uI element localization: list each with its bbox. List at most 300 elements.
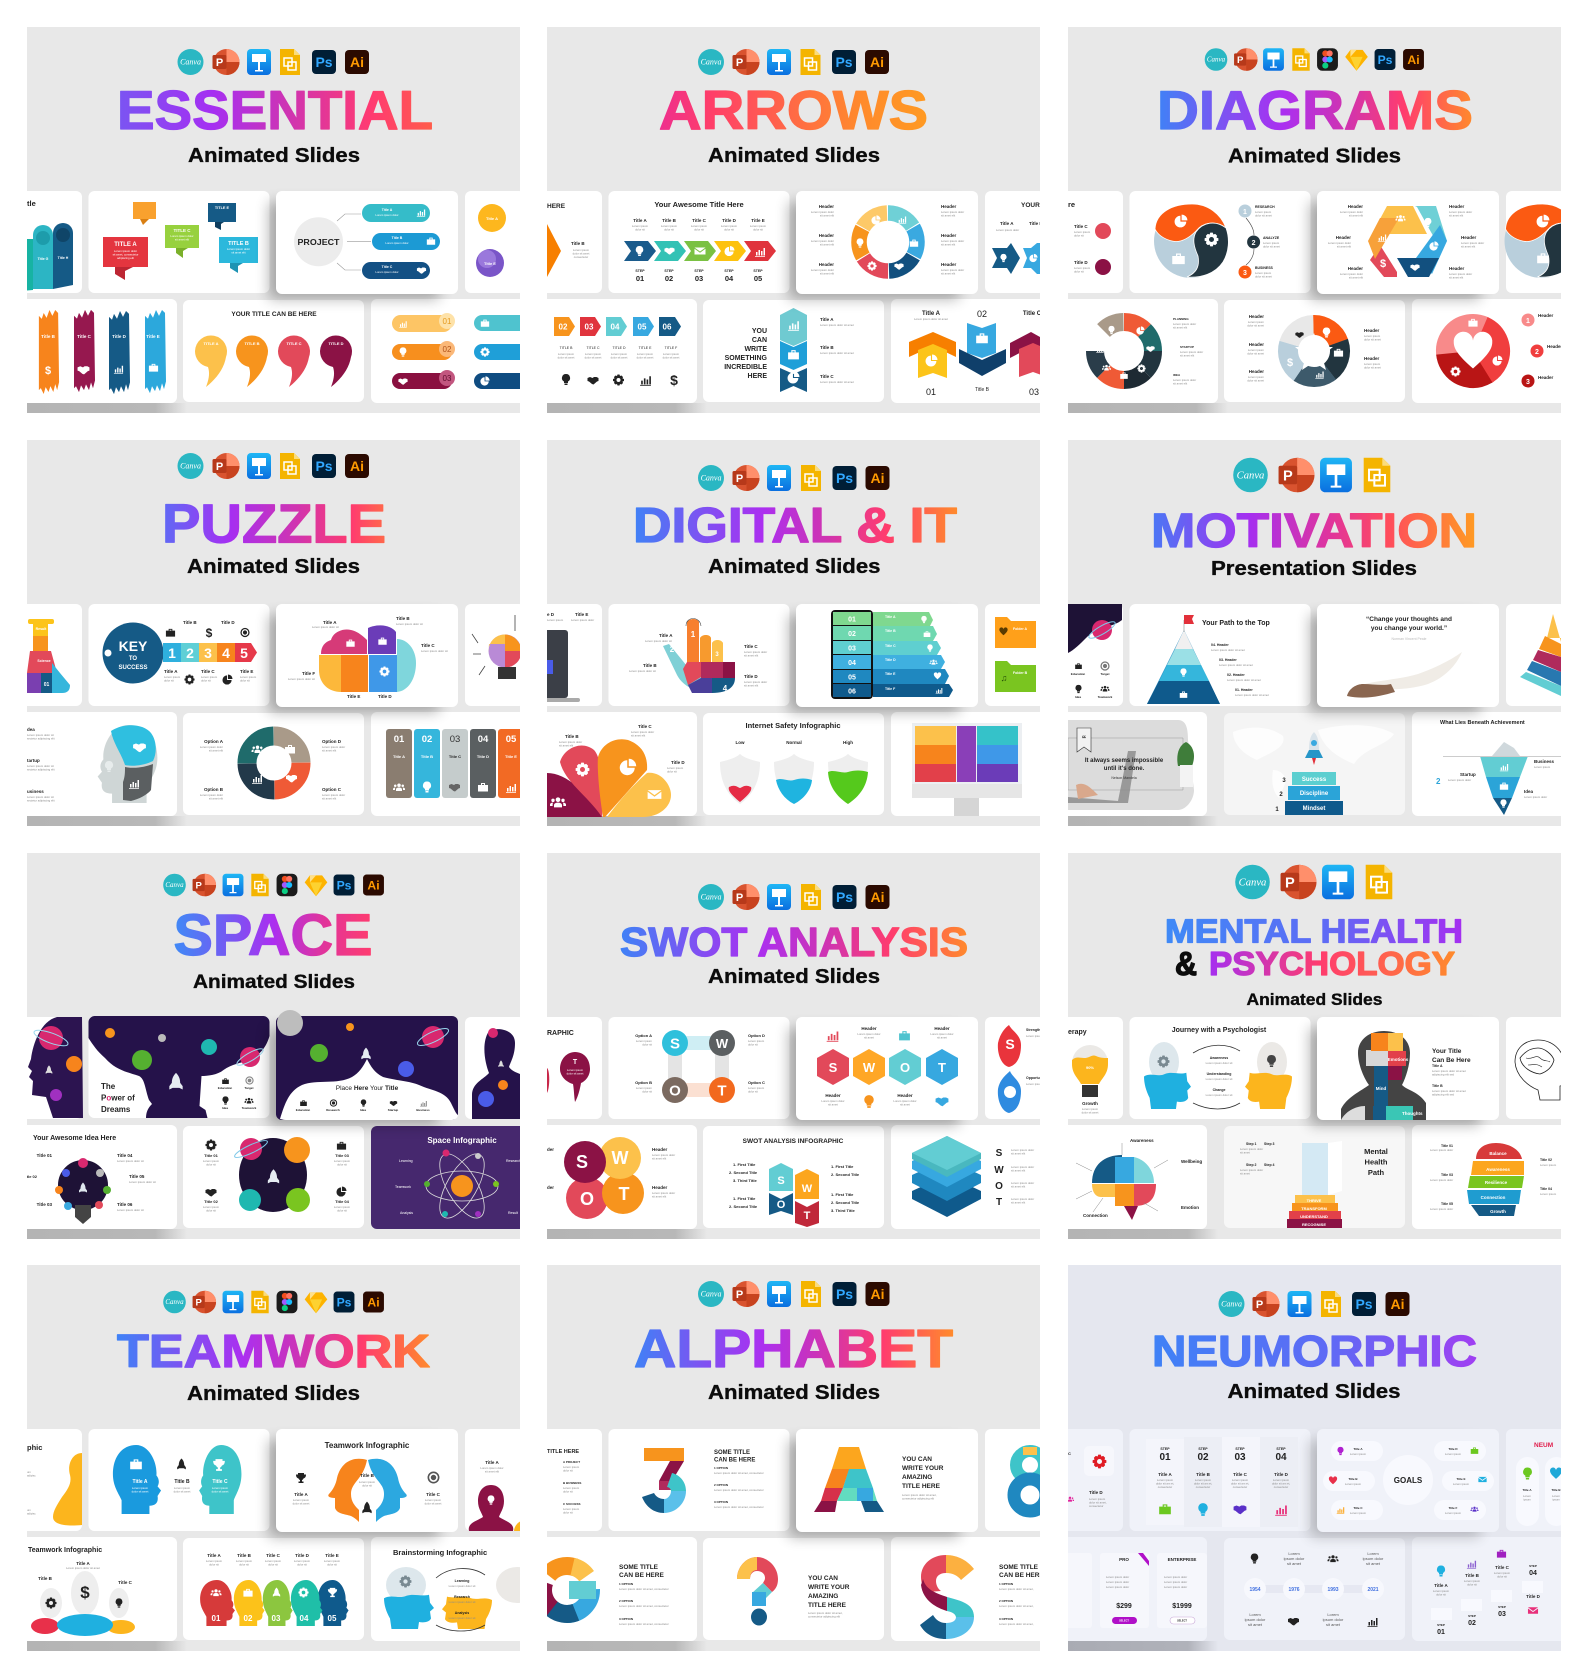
slide: staircase steps: dolor sit bbox=[1497, 1574, 1507, 1578]
slide: hand gesture: 3 bbox=[715, 652, 719, 658]
slide: key to success: Lorem ipsum bbox=[201, 675, 217, 679]
slide: planet corner: Education bbox=[1071, 672, 1085, 676]
slide: staircase steps: Title D bbox=[1526, 1594, 1541, 1599]
slide: arrow ring: sit amet elit bbox=[941, 213, 955, 217]
slide: swot brushes: Opportunity bbox=[1026, 1076, 1046, 1080]
slide: swot analysis infographic: 1. First Title bbox=[733, 1162, 756, 1167]
slide: head puzzle: sectetur adipiscing elit bbox=[27, 798, 55, 802]
slide: path to the top: Lorem ipsum dolor sit amet bbox=[1227, 678, 1261, 682]
slide: five part star bbox=[1224, 300, 1405, 402]
slide: laptop: Lorem ipsum dolor bbox=[571, 618, 594, 622]
slide: growth bulb: dolor sit amet bbox=[1082, 1110, 1099, 1114]
slide: swot layers: Lorem ipsum dolor bbox=[1011, 1197, 1034, 1201]
slide: letter S: 3 OPTION bbox=[999, 1617, 1013, 1621]
panel: Puzzle bbox=[19, 440, 526, 826]
slide: mental health stairs: Step 3 bbox=[1264, 1142, 1275, 1146]
slide: hand gesture: Lorem ipsum dolor sit bbox=[645, 639, 672, 643]
slide: place here your title: Idea bbox=[360, 1108, 366, 1112]
slide: brush banners bbox=[19, 299, 177, 403]
slide: rainbow head: Awareness bbox=[1486, 1167, 1510, 1172]
slide: quote: Norman Vincent Peale bbox=[1392, 637, 1427, 641]
slide: speech boxes: sit amet elit bbox=[175, 237, 189, 241]
title line 1: MENTAL HEALTH bbox=[1165, 912, 1463, 950]
slide: head puzzle: dea bbox=[27, 727, 35, 732]
slide: arrows up and down: 01 bbox=[926, 387, 936, 397]
title: NEUMORPHIC bbox=[1152, 1327, 1477, 1376]
slide: quote: you change your world.” bbox=[1371, 625, 1447, 632]
slide: hex list bbox=[703, 300, 884, 402]
slide: numbered steps: 05 bbox=[638, 322, 647, 332]
slide: key to success: SUCCESS bbox=[118, 665, 148, 671]
slide: arrow ring: Lorem ipsum dolor bbox=[811, 210, 834, 214]
slide: swot layers: sit amet elit bbox=[1011, 1151, 1025, 1155]
slide: five part star: Lorem ipsum bbox=[1248, 375, 1264, 379]
title: ARROWS bbox=[659, 79, 928, 141]
slide: brain puzzle bbox=[1060, 1125, 1207, 1229]
slide: five heads: Lorem ipsum bbox=[265, 1559, 281, 1563]
slide: partial chevrons bbox=[985, 191, 1045, 293]
slide: numeral 3: Lorem ipsum dolor sit amet, consectetur bbox=[714, 1471, 764, 1475]
app icons: P bbox=[216, 461, 223, 473]
slide: journey with psychologist bbox=[1130, 1017, 1310, 1119]
slide: puzzle donut: Lorem ipsum dolor bbox=[322, 745, 345, 749]
slide: rainbow head: Title 05 bbox=[1441, 1202, 1453, 1206]
slide: swot analysis infographic: 1. First Title bbox=[733, 1196, 756, 1201]
slide: swot circles: Lorem ipsum dolor bbox=[652, 1191, 675, 1195]
slide: swot layers: Lorem ipsum dolor bbox=[1011, 1165, 1034, 1169]
slide: pillars: Title H bbox=[58, 256, 69, 260]
slide: phone list: 05 bbox=[848, 674, 856, 682]
slide: puzzle ring: IDEA bbox=[1173, 373, 1181, 377]
slide: space infographic: Space Infographic bbox=[427, 1136, 497, 1145]
slide: iceberg: Startup bbox=[1460, 772, 1476, 777]
slide: hex list: SOMETHING bbox=[725, 355, 768, 362]
slide: folders: Folder A bbox=[1013, 627, 1028, 631]
slide: four steps: 04 bbox=[1275, 1452, 1287, 1463]
slide: four steps: Title D bbox=[1274, 1472, 1289, 1477]
slide: swot hexagons: S bbox=[829, 1060, 838, 1075]
slide: puzzle flask bbox=[19, 604, 82, 706]
app icons: Ps bbox=[337, 1295, 352, 1309]
slide: numbered pills: 02 bbox=[443, 345, 452, 354]
slide: space infographic: Result bbox=[508, 1211, 518, 1215]
slide: brainstorming: Lorem ipsum dolor sit bbox=[449, 1600, 476, 1604]
slide: letter G: Lorem ipsum dolor sit amet, consectetur bbox=[619, 1587, 669, 1591]
slide: chevron steps: STEP bbox=[753, 269, 763, 273]
slide: neumorphic pillars: Lorem bbox=[1552, 1494, 1560, 1498]
slide: swot circles: sit amet elit bbox=[652, 1194, 666, 1198]
slide: pricing tables: ENTERPRISE bbox=[1168, 1557, 1196, 1562]
slide: folders bbox=[985, 604, 1045, 706]
slide: space infographic: Teamwork bbox=[395, 1185, 411, 1189]
subtitle: Presentation Slides bbox=[1211, 558, 1417, 580]
slide: quote bubbles: TITLE A bbox=[204, 341, 219, 346]
slide: numbered steps: $ bbox=[670, 372, 678, 388]
slide: rainbow head: Lorem ipsum dolor bbox=[1430, 1148, 1453, 1152]
slide: space infographic bbox=[371, 1126, 526, 1229]
slide: timeline: Lorem bbox=[1327, 1612, 1339, 1617]
slide: puzzle cloud: Title D bbox=[378, 694, 392, 699]
slide: teams heads: Lorem ipsum bbox=[212, 1486, 228, 1490]
slide: teamwork two heads: Lorem ipsum bbox=[293, 1498, 309, 1502]
slide: staircase steps: STEP bbox=[1468, 1614, 1476, 1618]
app icons: P bbox=[1285, 875, 1295, 891]
slide: swot circles: T bbox=[618, 1184, 630, 1204]
slide: head puzzle: Lorem ipsum dolor sit bbox=[27, 764, 54, 768]
slide: circle titles bbox=[1068, 191, 1123, 293]
panel: Diagrams bbox=[1060, 27, 1579, 413]
slide: puzzle cloud: Title E bbox=[347, 694, 360, 699]
slide: puzzle ring: PLANNING bbox=[1173, 317, 1189, 321]
slide: pricing tables: Lorem ipsum dolor bbox=[1106, 1575, 1129, 1579]
slide: chevron steps: Your Awesome Title Here bbox=[654, 200, 744, 209]
slide: staircase steps: Lorem ipsum bbox=[1494, 1571, 1510, 1575]
slide: key to success: 4 bbox=[222, 645, 230, 661]
slide: title list: Lorem ipsum bbox=[563, 1507, 579, 1511]
slide: five heads bbox=[183, 1538, 364, 1640]
slide: place here your title: Business bbox=[416, 1108, 430, 1112]
slide: space infographic: Analysis bbox=[400, 1211, 413, 1215]
slide: staircase steps: STEP bbox=[1498, 1605, 1506, 1609]
slide: teamwork two heads: Teamwork Infographic bbox=[325, 1441, 410, 1450]
slide: swot circles: S bbox=[576, 1152, 588, 1172]
slide: swot hexagons: O bbox=[900, 1060, 910, 1075]
slide: iceberg bbox=[1412, 712, 1567, 816]
slide: swot hexagons: sit amet bbox=[900, 1102, 910, 1106]
slide: numbered steps: dolor sit amet bbox=[585, 355, 602, 359]
slide: hex list: YOU bbox=[752, 328, 767, 335]
slide: numeral 3: Lorem ipsum dolor sit amet, consectetur bbox=[714, 1488, 764, 1492]
slide: arrow ring: sit amet elit bbox=[820, 213, 834, 217]
slide: arrow ring bbox=[796, 191, 978, 294]
slide: five part star: Header bbox=[1249, 314, 1264, 319]
app icons bbox=[163, 874, 384, 896]
slide: place here your title bbox=[276, 1010, 458, 1120]
slide: timeline: ipsum dolor bbox=[1245, 1617, 1266, 1622]
app icons: Canva bbox=[165, 1298, 184, 1306]
app icons: Canva bbox=[1207, 56, 1226, 64]
slide: pillars: Title G bbox=[38, 257, 49, 261]
slide: planet corner: Idea bbox=[1075, 695, 1081, 699]
slide: path to the top: 04. Header bbox=[1211, 643, 1229, 647]
slide: neumorphic pillars bbox=[1506, 1429, 1568, 1531]
slide: mental health stairs: THRIVE bbox=[1307, 1198, 1322, 1203]
title: SPACE bbox=[174, 903, 372, 968]
slide: speech boxes: sit amet elit bbox=[231, 250, 246, 254]
slide: world map rocket bbox=[1224, 713, 1405, 815]
slide: journey with psychologist: Lorem ipsum dolor sit bbox=[1206, 1093, 1233, 1097]
subtitle: Animated Slides bbox=[708, 556, 880, 578]
slide: maroon quote bubble: Lorem ipsum bbox=[567, 1068, 583, 1072]
slide: hand gesture: sit amet elit bbox=[744, 653, 758, 657]
slide: partial arrow: Lorem ipsum bbox=[573, 248, 589, 252]
slide: puzzle donut bbox=[183, 713, 364, 815]
subtitle: Animated Slides bbox=[187, 1383, 360, 1405]
slide: five part star: Header bbox=[1364, 356, 1380, 361]
slide: timeline: ipsum dolor bbox=[1363, 1556, 1384, 1561]
slide: growth bulb: 90% bbox=[1086, 1065, 1094, 1070]
slide: key to success: Title C bbox=[201, 669, 215, 674]
slide: pricing tables bbox=[1050, 1537, 1207, 1641]
slide: puzzle flask: 01 bbox=[44, 682, 49, 688]
slide: five part star: Header bbox=[1249, 342, 1264, 347]
app icons: P bbox=[1256, 1299, 1263, 1311]
app icons: Ps bbox=[836, 1286, 853, 1302]
slide: staircase steps bbox=[1412, 1537, 1567, 1641]
title: PUZZLE bbox=[162, 492, 386, 554]
slide: puzzle cloud: Title A bbox=[323, 620, 337, 625]
slide: amber head: phic bbox=[27, 1443, 42, 1452]
slide: hex list: Lorem ipsum dolor sit amet bbox=[820, 351, 854, 355]
slide: staircase steps: Title A bbox=[1434, 1583, 1448, 1588]
slide: journey with psychologist: Journey with a Psychologist bbox=[1172, 1027, 1267, 1034]
app icons bbox=[1205, 48, 1424, 71]
slide: internet safety shields: High bbox=[843, 740, 853, 745]
slide: arrow ring: Header bbox=[819, 233, 834, 238]
slide: puzzle donut: sit amet elit bbox=[322, 796, 336, 800]
slide: mental health stairs: Lorem ipsum dolor bbox=[1240, 1147, 1263, 1151]
slide: idea bulb: Lorem ipsum dolor sit bbox=[117, 1159, 144, 1163]
slide: swot analysis infographic: O bbox=[777, 1199, 786, 1211]
slide: planet corner: Target bbox=[1101, 672, 1109, 676]
slide: project: Title A bbox=[382, 208, 393, 212]
slide: arrow ring: Lorem ipsum dolor bbox=[941, 210, 964, 214]
slide: swot link circles: dolor sit bbox=[642, 1089, 652, 1093]
slide: hex list: Lorem ipsum dolor sit amet bbox=[820, 323, 854, 327]
slide: circle titles: Title C bbox=[1074, 224, 1088, 229]
slide: four steps: 03 bbox=[1234, 1452, 1246, 1463]
app icons: P bbox=[736, 1289, 743, 1301]
slide: speech boxes: Lorem ipsum dolor bbox=[170, 234, 194, 238]
slide: swot hexagons: T bbox=[938, 1060, 946, 1075]
app icons bbox=[698, 49, 889, 75]
slide: pricing tables: SELECT bbox=[1119, 1620, 1129, 1622]
slide: power of dreams: Teamwork bbox=[242, 1106, 257, 1110]
app icons bbox=[698, 465, 890, 491]
slide: key to success: 2 bbox=[186, 645, 194, 661]
slide: swot link circles: S bbox=[670, 1036, 680, 1052]
slide: numbered steps: TITLE F bbox=[665, 346, 677, 350]
slide: letter S: 1 OPTION bbox=[999, 1582, 1013, 1586]
slide: question mark bbox=[703, 1538, 884, 1640]
slide: hand gesture: 2 bbox=[670, 645, 675, 654]
slide: brainstorming bbox=[371, 1537, 538, 1641]
slide: arrow ring: Lorem ipsum dolor bbox=[811, 239, 834, 243]
slide: heart ring: 1 bbox=[1526, 318, 1530, 325]
panel: Motivation bbox=[1060, 440, 1567, 826]
slide: power of dreams: Power of bbox=[101, 1094, 135, 1102]
slide: question mark: TITLE HERE bbox=[808, 1602, 847, 1609]
slide: hexagon ring: Lorem ipsum dolor bbox=[1328, 241, 1351, 245]
slide: hand gesture: Title B bbox=[643, 663, 657, 668]
slide: heart ring: 3 bbox=[1526, 379, 1530, 386]
slide: idea bulb: Lorem ipsum dolor sit bbox=[117, 1208, 144, 1212]
slide: brainstorming: Research bbox=[454, 1595, 470, 1599]
slide: staircase steps: 03 bbox=[1498, 1611, 1506, 1618]
slide: chevron steps: Title C bbox=[692, 218, 707, 223]
slide: title list: TITLE HERE bbox=[547, 1449, 579, 1455]
app icons: Canva bbox=[701, 58, 721, 66]
slide: teams heads: dolor sit amet bbox=[212, 1489, 229, 1493]
slide: path to the top: Your Path to the Top bbox=[1202, 620, 1270, 627]
slide: numbered pills: 01 bbox=[443, 317, 452, 326]
panel: Mental Health & Psychology bbox=[1060, 853, 1568, 1239]
slide: yin yang: RESEARCH bbox=[1255, 205, 1275, 209]
slide: numbered steps: dolor sit amet bbox=[558, 355, 575, 359]
slide: head puzzle title: Lorem ipsum dolor sit amet bbox=[1432, 1069, 1466, 1073]
slide: chevron steps: STEP bbox=[724, 269, 734, 273]
slide: brush banners: Title C bbox=[77, 334, 92, 339]
slide: mental health stairs: Health bbox=[1365, 1158, 1388, 1166]
slide: swot analysis infographic: SWOT ANALYSIS INFOGRAPHIC bbox=[743, 1138, 844, 1145]
slide: iceberg: Lorem ipsum bbox=[1534, 765, 1551, 769]
slide: puzzle cloud: Title C bbox=[421, 643, 435, 648]
slide: head puzzle: Lorem ipsum dolor sit bbox=[27, 733, 54, 737]
slide: goals: Lorem ipsum bbox=[1445, 1452, 1462, 1456]
slide: rocket planets: Title 04 bbox=[335, 1199, 350, 1204]
slide: chevron steps: Lorem ipsum bbox=[721, 224, 737, 228]
slide: numbered steps: 06 bbox=[663, 322, 672, 332]
card shadow bbox=[1310, 1028, 1480, 1125]
slide: rainbow head: Lorem ipsum bbox=[1540, 1163, 1557, 1167]
subtitle: Animated Slides bbox=[1246, 990, 1382, 1009]
slide: staircase steps: Lorem ipsum bbox=[1464, 1579, 1480, 1583]
slide: four steps: dolor sit am et, bbox=[1156, 1481, 1174, 1485]
app icons: Canva bbox=[180, 58, 201, 66]
slide: numbered steps: dolor sit amet bbox=[663, 355, 680, 359]
slide: laptop: e D bbox=[547, 612, 555, 617]
slide: world map rocket: 3 bbox=[1282, 778, 1286, 784]
slide: numbered steps bbox=[539, 299, 697, 403]
slide: timeline: Lorem bbox=[1249, 1612, 1261, 1617]
slide: pricing tables: Lorem ipsum dolor bbox=[1106, 1580, 1129, 1584]
slide: gear tile: Title D bbox=[1089, 1490, 1103, 1495]
slide: rainbow head: Connection bbox=[1481, 1195, 1506, 1200]
app icons: P bbox=[1283, 468, 1293, 484]
slide: timeline: 2021 bbox=[1367, 1587, 1379, 1593]
slide: world map rocket: Discipline bbox=[1300, 791, 1329, 797]
slide: swot analysis infographic: 2. Second Title bbox=[831, 1172, 860, 1177]
slide: hexagon ring: Header bbox=[1449, 204, 1465, 209]
slide: rocket planets: dolor sit bbox=[206, 1208, 216, 1212]
slide: internet safety shields: Internet Safety Infographic bbox=[745, 721, 841, 730]
slide: brain puzzle: Wellbeing bbox=[1181, 1159, 1202, 1164]
card shadow bbox=[269, 1028, 439, 1125]
card shadow bbox=[789, 202, 959, 299]
slide: head puzzle title: Your Title bbox=[1432, 1048, 1461, 1055]
slide: puzzle donut: Option D bbox=[322, 739, 342, 744]
slide: key to success: dolor sit bbox=[201, 678, 211, 682]
card shadow bbox=[1310, 1440, 1480, 1537]
slide: chevron steps: dolor sit bbox=[694, 227, 704, 231]
panel: Teamwork bbox=[19, 1265, 538, 1651]
card shadow bbox=[789, 615, 959, 712]
slide: quote bbox=[1317, 604, 1499, 707]
card shadow bbox=[1310, 615, 1480, 712]
slide: partial chevrons: Lorem ipsum dolor bbox=[996, 228, 1019, 232]
slide: swot brushes: Strength bbox=[1026, 1028, 1040, 1032]
slide: key to success: 5 bbox=[240, 645, 248, 661]
slide: letter G: SOME TITLE bbox=[619, 1564, 658, 1571]
slide: letter S: Lorem ipsum dolor sit amet, bbox=[999, 1604, 1034, 1608]
slide: five part star: Lorem ipsum bbox=[1248, 348, 1264, 352]
slide: quote bubbles: YOUR TITLE CAN BE HERE bbox=[231, 311, 317, 318]
title: ALPHABET bbox=[634, 1319, 953, 1379]
app icons: Ps bbox=[1355, 1296, 1373, 1312]
slide: timeline: Lorem bbox=[1367, 1551, 1379, 1556]
slide: fan diagram bbox=[539, 712, 697, 817]
slide: arrows up and down: 02 bbox=[977, 309, 987, 319]
subtitle: Animated Slides bbox=[708, 1382, 880, 1404]
slide: rocket planets: dolor sit bbox=[206, 1162, 216, 1166]
slide: pricing tables: Lorem ipsum dolor bbox=[1164, 1580, 1187, 1584]
slide: numbered steps: Lorem ipsum bbox=[558, 352, 574, 356]
slide: letter A bbox=[796, 1429, 978, 1532]
slide: four steps: Lorem ipsum bbox=[1273, 1478, 1289, 1482]
slide: title list: dolor sit bbox=[563, 1489, 573, 1493]
slide: staircase steps: STEP bbox=[1529, 1564, 1537, 1568]
slide: key to success: 1 bbox=[168, 645, 176, 661]
slide: hexagon ring: sit amet elit bbox=[1349, 213, 1363, 217]
slide: staircase steps: Title B bbox=[1465, 1573, 1480, 1578]
slide: idea bulb bbox=[19, 1125, 177, 1229]
slide: hex list: HERE bbox=[748, 373, 767, 380]
slide: blobs: Title A bbox=[486, 216, 498, 221]
slide: goals: Lorem ipsum bbox=[1445, 1511, 1462, 1515]
slide: teams heads: dolor sit amet bbox=[132, 1489, 149, 1493]
slide: puzzle donut: Lorem ipsum dolor bbox=[200, 793, 223, 797]
panel: Alphabet bbox=[533, 1265, 1046, 1651]
slide: brainstorming: Analysis bbox=[455, 1611, 469, 1615]
slide: five heads: Lorem ipsum bbox=[324, 1559, 340, 1563]
slide: power of dreams: Dreams bbox=[101, 1105, 131, 1114]
slide: gear tile bbox=[1060, 1429, 1123, 1531]
slide: iceberg: Lorem ipsum dolor bbox=[1524, 795, 1547, 799]
slide: swot link circles: dolor sit bbox=[748, 1089, 758, 1093]
slide: five heads: Title D bbox=[295, 1553, 310, 1558]
slide: hand gesture: 1 bbox=[691, 630, 696, 639]
slide: mental health stairs: RECOGNISE bbox=[1302, 1222, 1326, 1227]
slide: five heads: Lorem ipsum bbox=[236, 1559, 252, 1563]
slide: idea bulb: Title 03 bbox=[37, 1202, 52, 1207]
slide: chevron steps: Lorem ipsum bbox=[632, 224, 648, 228]
slide: team blobs: Lorem ipsum dolor sit amet bbox=[66, 1566, 100, 1570]
subtitle: Animated Slides bbox=[1228, 146, 1401, 168]
slide: hand gesture: Lorem ipsum dolor bbox=[744, 650, 767, 654]
slide: phone list: 04 bbox=[848, 660, 856, 667]
slide: four steps: dolor sit am et, bbox=[1231, 1481, 1249, 1485]
slide: neumorphic pillars: Lorem bbox=[1523, 1494, 1531, 1498]
slide: five heads: 03 bbox=[272, 1614, 281, 1623]
slide: head puzzle title bbox=[1317, 1017, 1499, 1120]
slide: rainbow head: Lorem ipsum dolor bbox=[1430, 1207, 1453, 1211]
slide: hex list: Title C bbox=[820, 374, 834, 379]
slide: mental health stairs: sit amet bbox=[1240, 1150, 1250, 1154]
slide: yin yang bbox=[1130, 191, 1310, 293]
slide: partial chevrons: Title B bbox=[1029, 221, 1043, 226]
slide: arrows up and down: Title C bbox=[1023, 311, 1042, 317]
slide: numbered columns: 05 bbox=[506, 734, 517, 745]
slide: swot hexagons: Lorem ipsum dolor bbox=[930, 1032, 954, 1036]
slide: head silhouette space bbox=[465, 1017, 525, 1119]
slide: iceberg: Idea bbox=[1524, 789, 1534, 794]
slide: staircase steps: 02 bbox=[1468, 1620, 1476, 1627]
subtitle: Animated Slides bbox=[193, 972, 355, 993]
slide: arrow ring: Lorem ipsum dolor bbox=[941, 239, 964, 243]
slide: swot hexagons: Lorem ipsum dolor bbox=[857, 1032, 881, 1036]
slide: swot brushes: Lorem ipsum bbox=[1026, 1034, 1043, 1038]
slide: maroon head: Title A bbox=[485, 1460, 499, 1465]
